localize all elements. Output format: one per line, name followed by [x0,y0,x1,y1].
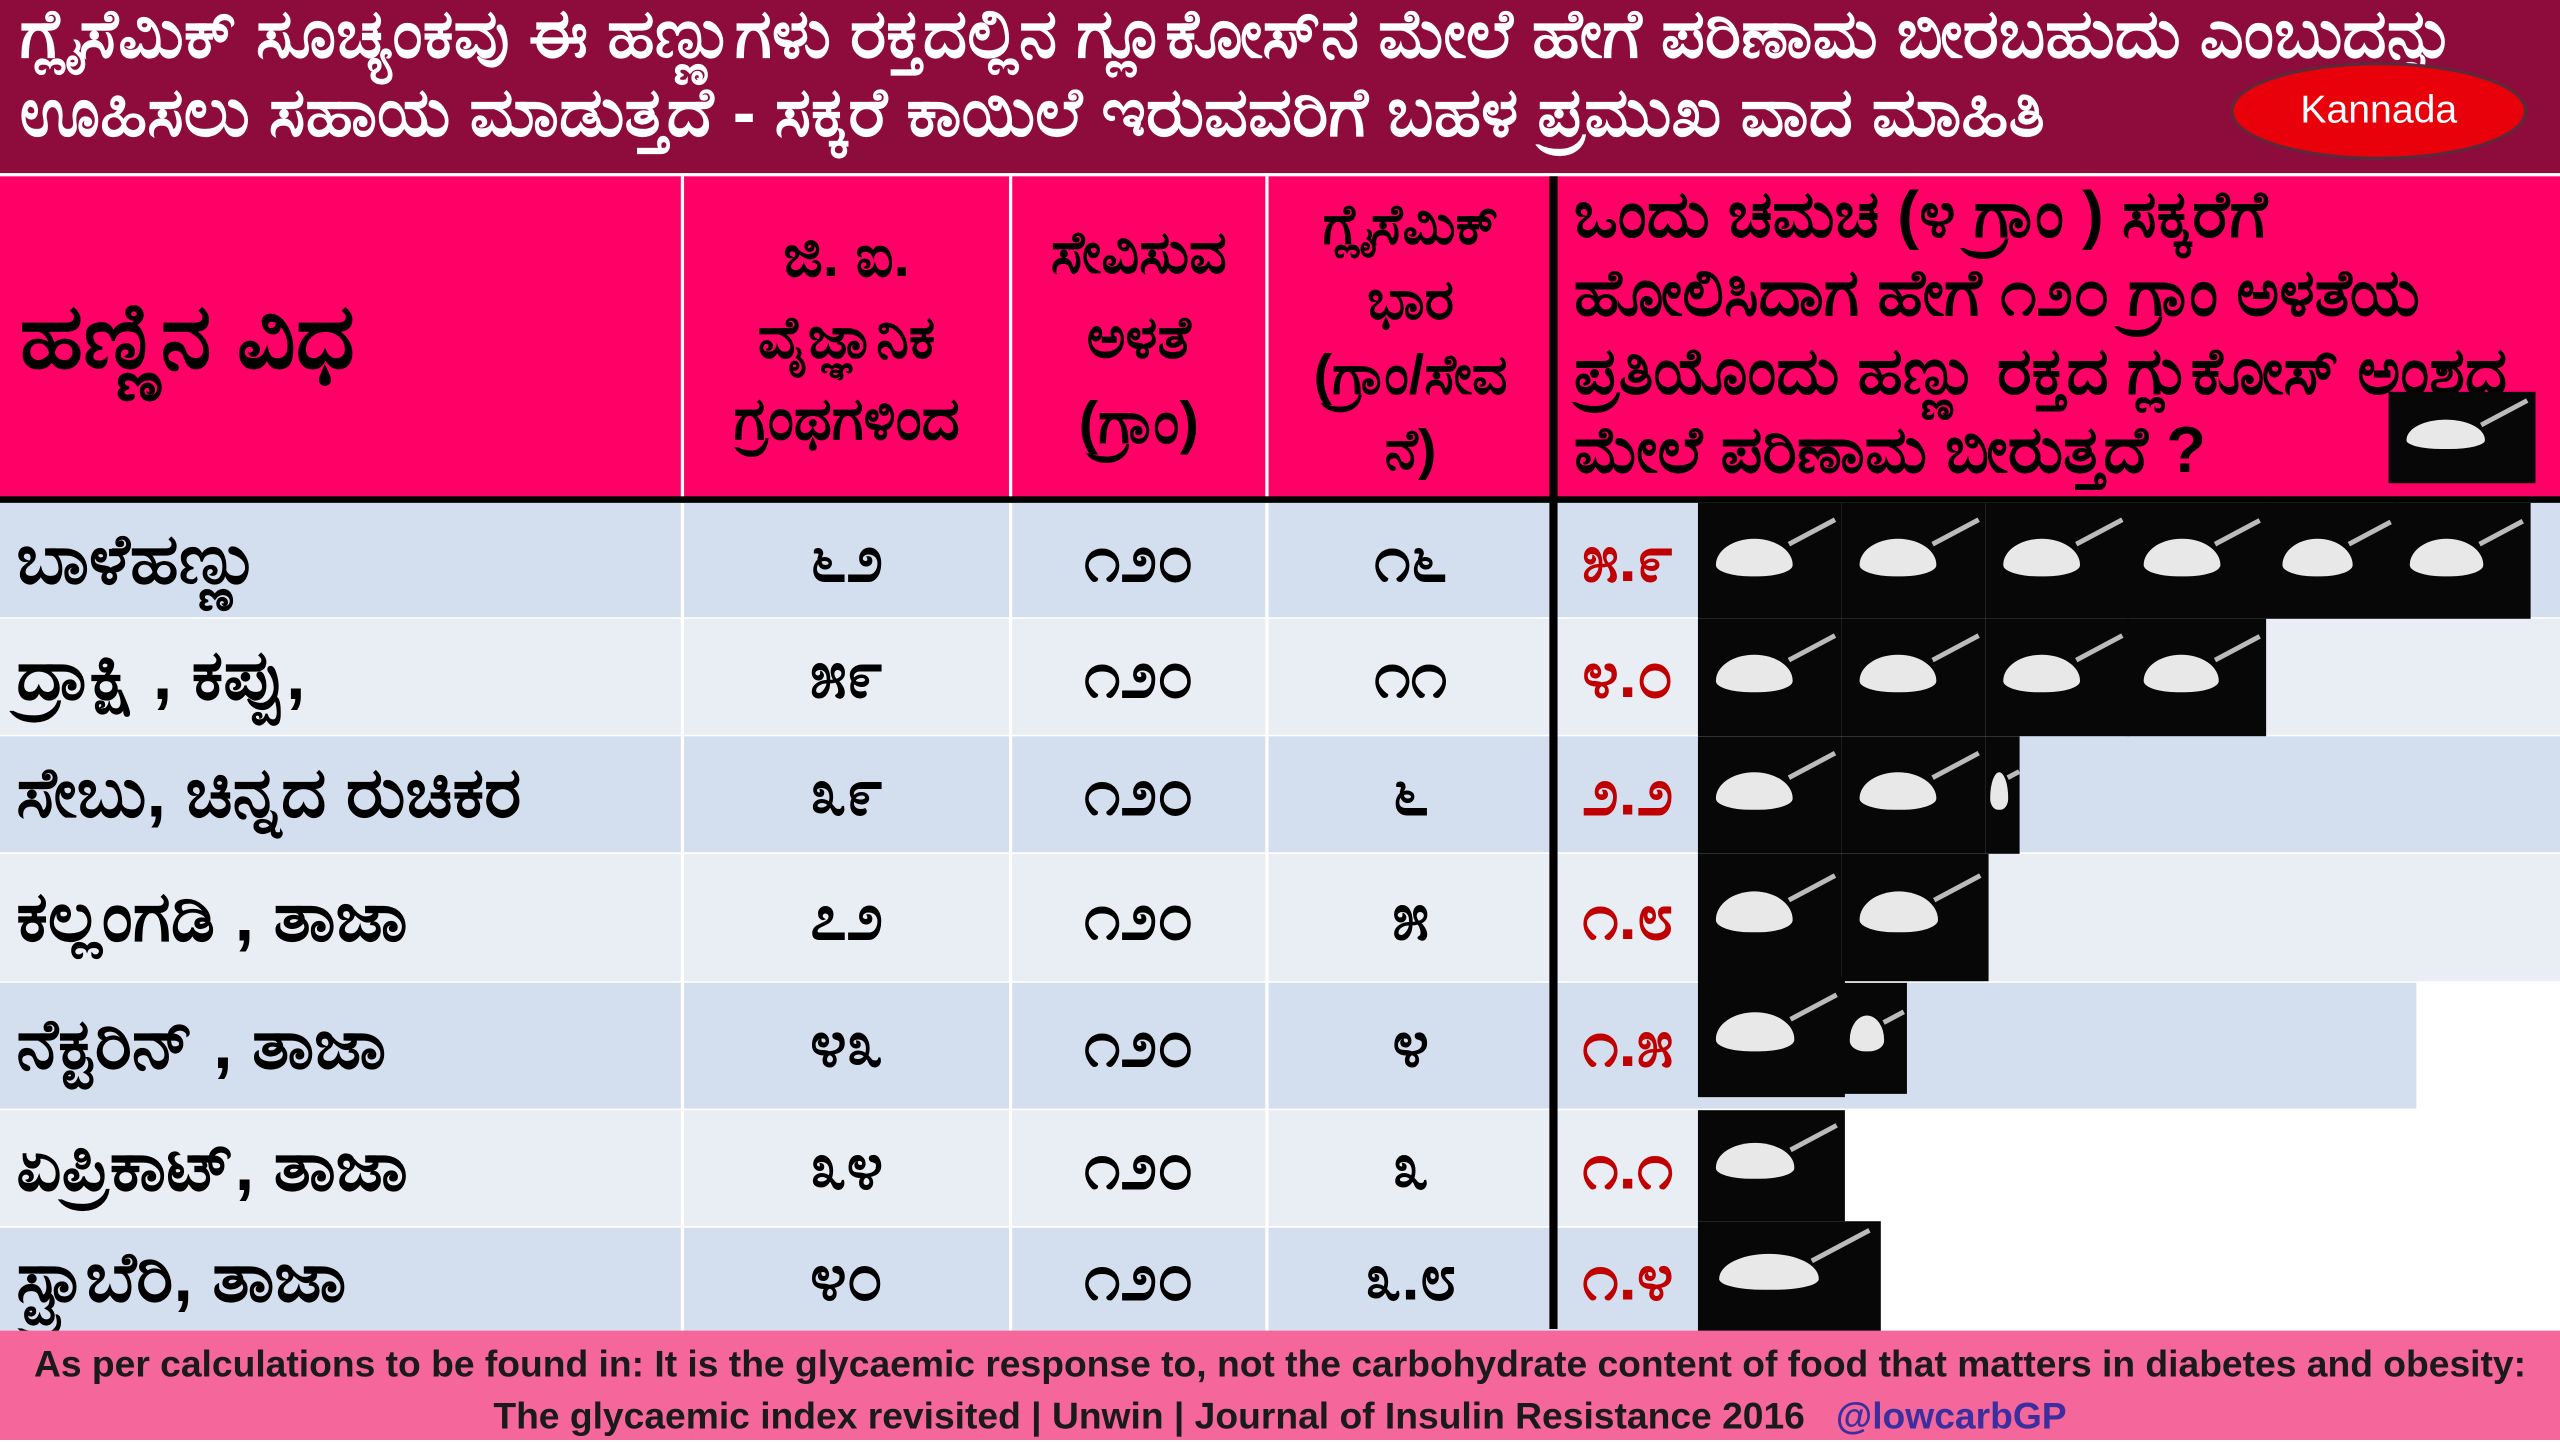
row 5: ೪ [1392,1009,1429,1081]
row 5: ನೆಕ್ಟರಿನ್ , ತಾಜಾ [16,1006,386,1084]
row 2: ೪.೦ [1582,640,1673,712]
row 3: ೨.೨ [1582,758,1673,829]
title band [0,0,2560,173]
header: glycemic load: (ಗ್ರಾಂ/ಸೇವ [1314,344,1508,406]
header: serving [1009,176,1265,498]
row 7: ೧೨೦ [1084,1242,1194,1314]
row 7 [0,1221,1881,1331]
header: serving: ಅಳತೆ [1087,303,1191,370]
row 6: ಏಪ್ರಿಕಾಟ್, ತಾಜಾ [16,1128,408,1207]
row 6 [0,1110,1845,1226]
row 1: ೬೨ [810,523,883,595]
header: glycemic load: ಗ್ಲೈಸೆಮಿಕ್ [1323,193,1499,256]
row 4: ೫ [1392,881,1429,953]
row 2: ೧೨೦ [1084,640,1194,712]
header: GI: ವೈಜ್ಞಾನಿಕ [758,303,935,370]
row 4: ೧೨೦ [1084,881,1194,953]
header: serving: (ಗ್ರಾಂ) [1079,388,1199,455]
row 1 [0,502,2560,619]
header: GI: ಜಿ. ಐ. [783,221,910,288]
row 6: ೩ [1392,1131,1429,1203]
row 1: ೧೬ [1374,523,1447,595]
header: serving: ಸೇವಿಸುವ [1051,218,1227,285]
row 1: ೫.೯ [1582,523,1673,595]
row 3: ೩೯ [810,758,883,829]
row 6: ೧.೧ [1582,1131,1673,1203]
row 4: ೭೨ [810,881,883,953]
header: glycemic load: ನೆ) [1385,419,1436,481]
language badge [2230,62,2527,160]
header: spoon question: ಒಂದು ಚಮಚ (೪ ಗ್ರಾಂ ) ಸಕ್ಕರೆಗೆ ಹೋಲಿಸಿದಾಗ ಹೇಗೆ ೧೨೦ ಗ್ರಾಂ ಅಳತೆಯ ಪ್ರತಿಯೊಂದು ಹಣ್ಣು ರಕ್ತದ ಗ್ಲುಕೋಸ್ ಅಂಶದ ಮೇಲೆ ಪರಿಣಾಮ ಬೀರುತ್ತದೆ ? [1574,180,2507,487]
row 7: ೪೦ [810,1242,883,1314]
row 3: ಸೇಬು, ಚಿನ್ನದ ರುಚಿಕರ [16,754,521,833]
row 1: ಬಾಳೆಹಣ್ಣು [16,520,261,598]
language badge: Kannada [2300,88,2457,132]
row 5: ೧.೫ [1582,1009,1673,1081]
row 4: ೧.೮ [1582,881,1673,953]
header: fruit type: ಹಣ್ಣಿನ ವಿಧ [20,284,355,387]
header: GI [681,176,1009,498]
row 5: ೪೩ [810,1009,883,1081]
row 7: ಸ್ಟ್ರಾಬೆರಿ, ತಾಜಾ [16,1239,346,1318]
row 2: ದ್ರಾಕ್ಷಿ , ಕಪ್ಪು, [16,637,305,715]
row 3: ೬ [1392,758,1429,829]
header row [0,176,2560,498]
title text [20,0,2456,159]
row 1: ೧೨೦ [1084,523,1194,595]
header: GI: ಗ್ರಂಥಗಳಿಂದ [733,384,960,451]
row 2 [0,618,2560,736]
row 4 [0,854,2560,982]
icon: header spoon [2389,392,2536,483]
footer: As per calculations to be found in: It is the glycaemic response to, not the carbohydrate content of food that matters in diabetes and obesity: [34,1342,2526,1384]
row 5 [0,976,2416,1108]
row 6: ೧೨೦ [1084,1131,1194,1203]
row 2: ೧೧ [1374,640,1447,712]
row 3 [0,736,2560,854]
footer [0,1331,2560,1440]
row 2: ೫೯ [810,640,883,712]
header: glycemic load [1265,176,1553,498]
footer: The glycaemic index revisited | Unwin | Journal of Insulin Resistance 2016 @lowcarbGP [493,1394,2067,1437]
row 7: ೧.೪ [1582,1242,1673,1314]
row 7: ೩.೮ [1365,1242,1456,1314]
header: glycemic load: ಭಾರ [1367,269,1454,331]
row 4: ಕಲ್ಲಂಗಡಿ , ತಾಜಾ [16,878,408,956]
row 6: ೩೪ [810,1131,883,1203]
title text: ಊಹಿಸಲು ಸಹಾಯ ಮಾಡುತ್ತದೆ - ಸಕ್ಕರೆ ಕಾಯಿಲೆ ಇರುವವರಿಗೆ ಬಹಳ ಪ್ರಮುಖ ವಾದ ಮಾಹಿತಿ [20,73,2045,150]
row 3: ೧೨೦ [1084,758,1194,829]
row 5: ೧೨೦ [1084,1009,1194,1081]
black separator lines [0,496,2560,503]
